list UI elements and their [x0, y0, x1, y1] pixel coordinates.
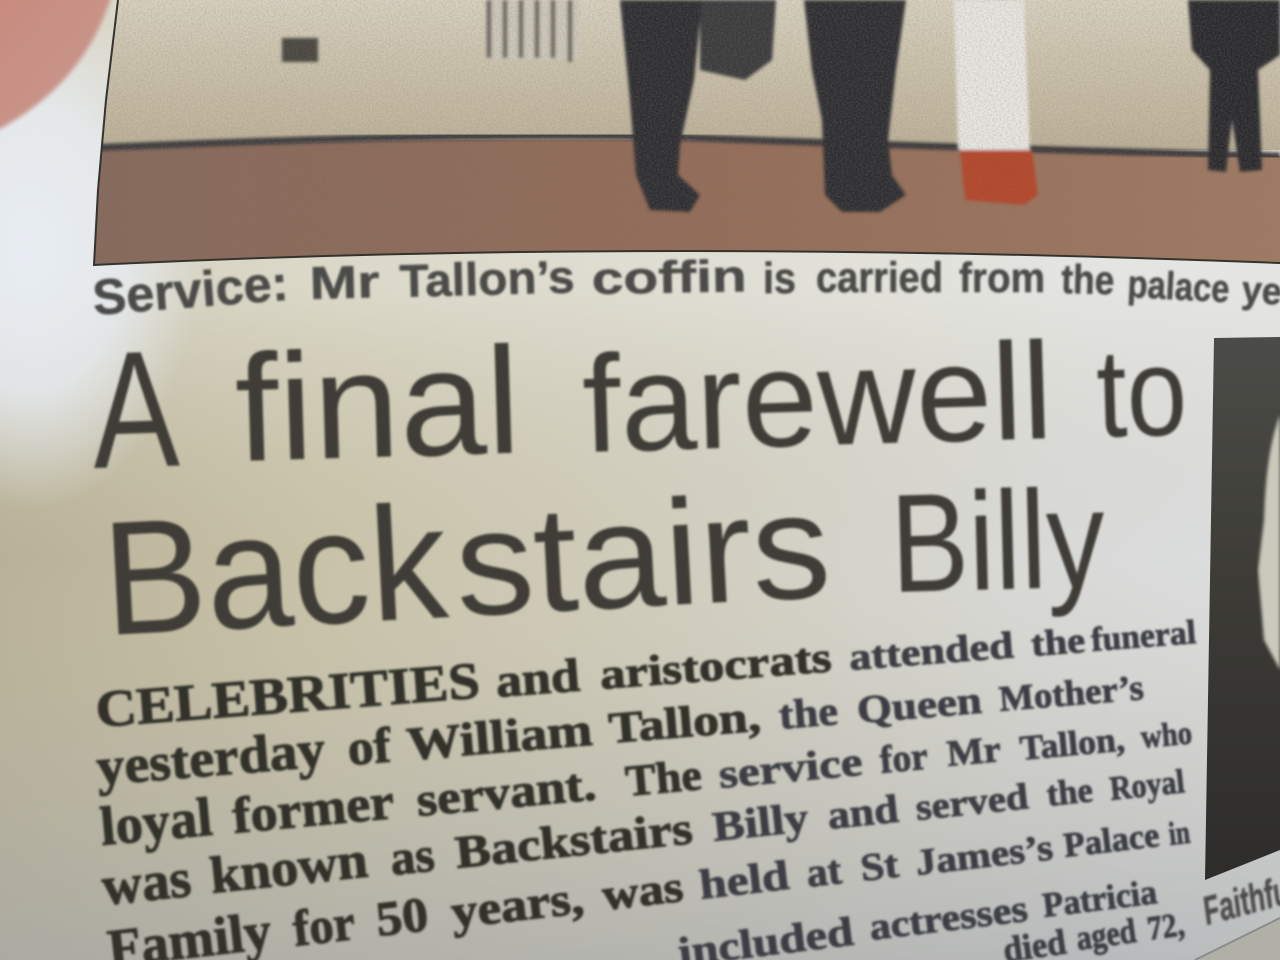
photo edge [94, 0, 1280, 265]
headline line 1: final [233, 316, 523, 494]
body line 2: yesterday [94, 720, 327, 797]
body line 5: St [858, 843, 901, 890]
body line 6 [675, 872, 1159, 960]
body line 3: Tallon, [1018, 719, 1126, 768]
body line 4: as [387, 827, 437, 886]
caption: service: is [763, 254, 796, 303]
body line 5: Palace [1061, 815, 1161, 865]
body line 2: Mother’s [997, 667, 1145, 719]
body line 4: was [99, 847, 194, 917]
caption: service [90, 250, 1280, 326]
body line 4: Royal [1108, 763, 1186, 808]
body line 1: CELEBRITIES [94, 653, 482, 739]
article body text [94, 614, 1197, 960]
standing figures [620, 0, 1280, 212]
photo print grain [90, 0, 1280, 270]
body line 3: Mr [945, 729, 1003, 775]
headline line 2: Billy [889, 459, 1107, 622]
caption: service: coffin [591, 250, 747, 304]
news photograph: coffin service [90, 0, 1280, 270]
body line 3: for [878, 735, 930, 782]
body line 4: Backstairs [453, 802, 695, 878]
body line 3: service [717, 738, 864, 797]
body line 5: James’s [913, 827, 1055, 884]
body line 2: of [345, 717, 394, 776]
caption: service: Mr [309, 255, 380, 309]
body line 2: the [777, 687, 840, 738]
body line 6: Patricia [1040, 872, 1159, 925]
body line 5: in [1167, 815, 1192, 853]
caption: service: Tallon’s [399, 250, 575, 307]
body line 1: the [1030, 620, 1086, 664]
body line 2: Queen [855, 679, 984, 732]
body line 4: and [825, 786, 901, 838]
body line 4: Billy [710, 795, 811, 851]
headline line 2: stairs [451, 461, 834, 648]
body line 2: Tallon, [607, 692, 762, 753]
body line 7: aged [1074, 911, 1139, 958]
body line 4: known [207, 832, 370, 905]
body line 3: former [230, 774, 396, 845]
body line 1 [94, 614, 1197, 739]
choir robe figure [954, 0, 1038, 205]
body line 3: loyal [97, 786, 215, 857]
body line 5: years, [448, 872, 586, 939]
body line 1: aristocrats [598, 634, 833, 699]
body line 1: attended [847, 624, 1015, 679]
headline line 1: to [1095, 320, 1189, 464]
body line 5: for [290, 895, 358, 958]
body line 5: was [600, 862, 686, 920]
body line 5: 50 [373, 886, 431, 947]
headline line 1 [90, 314, 1189, 504]
body line 2 [94, 667, 1145, 797]
body line 5: held [697, 853, 792, 909]
body line 5 [104, 815, 1192, 960]
caption: service: from [959, 254, 1045, 301]
body line 4 [99, 763, 1186, 917]
railing and wall fixture [282, 0, 580, 62]
body line 3 [97, 715, 1194, 857]
body line 3: who [1139, 715, 1194, 756]
caption: service: palace [1127, 263, 1231, 311]
headline line 2: Back [98, 471, 452, 670]
body line 6: actresses [867, 888, 1030, 949]
caption: service: Service: [90, 255, 290, 326]
body line 1: and [494, 650, 582, 708]
photo wall and floor [90, 0, 1280, 270]
caption: service: the [1061, 256, 1115, 303]
caption: service: carried [816, 254, 943, 302]
body line 7: 72, [1145, 906, 1187, 948]
headline line 1: farewell [580, 314, 1055, 482]
body line 2: William [405, 704, 594, 771]
body line 1: funeral [1090, 614, 1197, 659]
body line 3: servant. [414, 759, 598, 827]
body line 7 [1001, 906, 1187, 960]
body line 3: The [623, 750, 704, 806]
body line 5: at [804, 846, 844, 896]
body line 4: the [1045, 770, 1095, 814]
portrait photograph [1200, 330, 1280, 890]
headline line 1: A [90, 317, 181, 504]
headline [90, 314, 1189, 670]
body line 4: served [914, 776, 1031, 829]
headline line 2 [98, 459, 1107, 670]
finger in the corner [0, 0, 112, 132]
